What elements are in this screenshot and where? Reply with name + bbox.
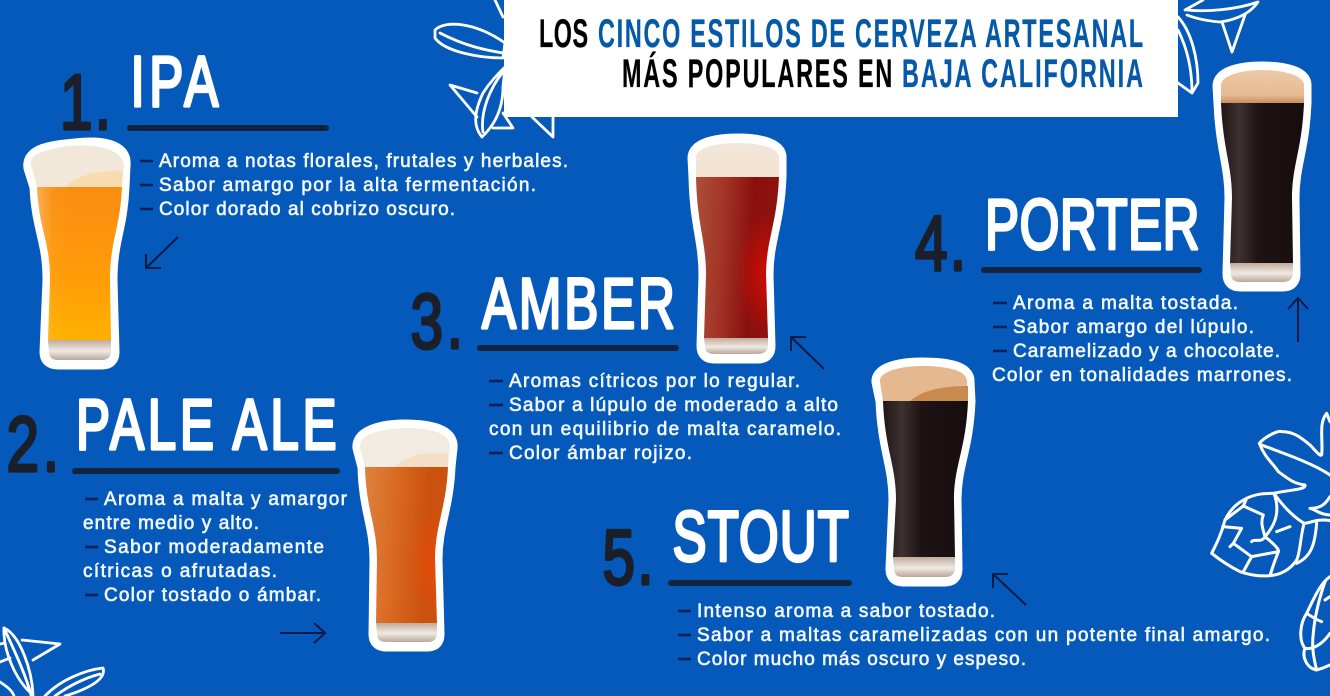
heading Stout: STOUT <box>672 498 849 577</box>
section 1: IPA <box>31 43 568 362</box>
text list IPA <box>140 151 568 220</box>
underline <box>668 580 852 586</box>
text list Stout: Sabor a maltas caramelizadas con un potente final amargo. <box>697 625 1270 646</box>
arrow <box>280 623 325 643</box>
arrow <box>791 337 824 369</box>
text list Porter: Color en tonalidades marrones. <box>992 365 1292 386</box>
text list Amber: con un equilibrio de malta caramelo. <box>489 419 841 440</box>
text list Porter: Aroma a malta tostada. <box>1013 293 1238 314</box>
text list Porter: Caramelizado y a chocolate. <box>1013 341 1280 362</box>
text list Stout: Intenso aroma a sabor tostado. <box>697 601 995 622</box>
glass: IPA <box>31 145 124 362</box>
title banner <box>504 0 1178 117</box>
glass: Amber <box>695 141 779 356</box>
arrow <box>993 574 1026 605</box>
heading IPA: IPA <box>130 43 219 122</box>
section 3: Amber <box>410 141 841 464</box>
section 4: Porter <box>915 69 1308 386</box>
text list Pale Ale: cítricas o afrutadas. <box>83 561 277 582</box>
underline <box>981 267 1202 273</box>
arrow <box>1288 298 1308 342</box>
text list Amber: Color ámbar rojizo. <box>509 443 692 464</box>
text list Porter <box>992 293 1292 386</box>
decoration: hops right <box>1212 413 1330 670</box>
title banner: MÁS POPULARES EN <box>622 50 892 96</box>
arrow <box>146 237 178 268</box>
number 5: 5. <box>602 514 654 601</box>
heading Amber: AMBER <box>482 265 675 344</box>
text list Amber: Aromas cítricos por lo regular. <box>509 371 800 392</box>
section 2: Pale Ale <box>6 386 450 644</box>
decoration: leaves top left <box>435 0 553 137</box>
text list Amber <box>489 371 841 464</box>
title banner: CINCO ESTILOS DE CERVEZA ARTESANAL <box>598 10 1143 56</box>
section 5: Stout <box>602 365 1270 670</box>
underline <box>477 345 679 351</box>
number 3: 3. <box>410 278 463 365</box>
decoration: leaves bottom left <box>0 628 103 696</box>
number 2: 2. <box>6 401 59 488</box>
text list IPA: Color dorado al cobrizo oscuro. <box>159 199 455 220</box>
text list Pale Ale: Aroma a malta y amargor <box>104 489 348 510</box>
title banner: LOS <box>539 10 588 56</box>
text list Pale Ale: entre medio y alto. <box>83 513 259 534</box>
glass: Pale Ale <box>360 427 450 644</box>
text list IPA: Aroma a notas florales, frutales y herbales. <box>159 151 568 172</box>
heading Porter: PORTER <box>985 186 1200 265</box>
heading Pale Ale: PALE ALE <box>76 386 337 465</box>
text list Stout: Color mucho más oscuro y espeso. <box>697 649 1026 670</box>
number 1: 1. <box>60 59 111 146</box>
text list Pale Ale <box>83 489 348 606</box>
text list Amber: Sabor a lúpulo de moderado a alto <box>509 395 838 416</box>
text list Pale Ale: Color tostado o ámbar. <box>104 585 321 606</box>
title banner: BAJA CALIFORNIA <box>902 50 1143 96</box>
underline <box>72 468 340 474</box>
number 4: 4. <box>915 200 966 287</box>
text list Pale Ale: Sabor moderadamente <box>104 537 324 558</box>
underline <box>127 125 329 131</box>
glass: Porter <box>1220 69 1304 284</box>
text list IPA: Sabor amargo por la alta fermentación. <box>159 175 536 196</box>
text list Porter: Sabor amargo del lúpulo. <box>1013 317 1254 338</box>
decoration: leaves top right <box>1178 0 1258 93</box>
text list Stout <box>678 601 1270 670</box>
glass: Stout <box>879 365 968 579</box>
